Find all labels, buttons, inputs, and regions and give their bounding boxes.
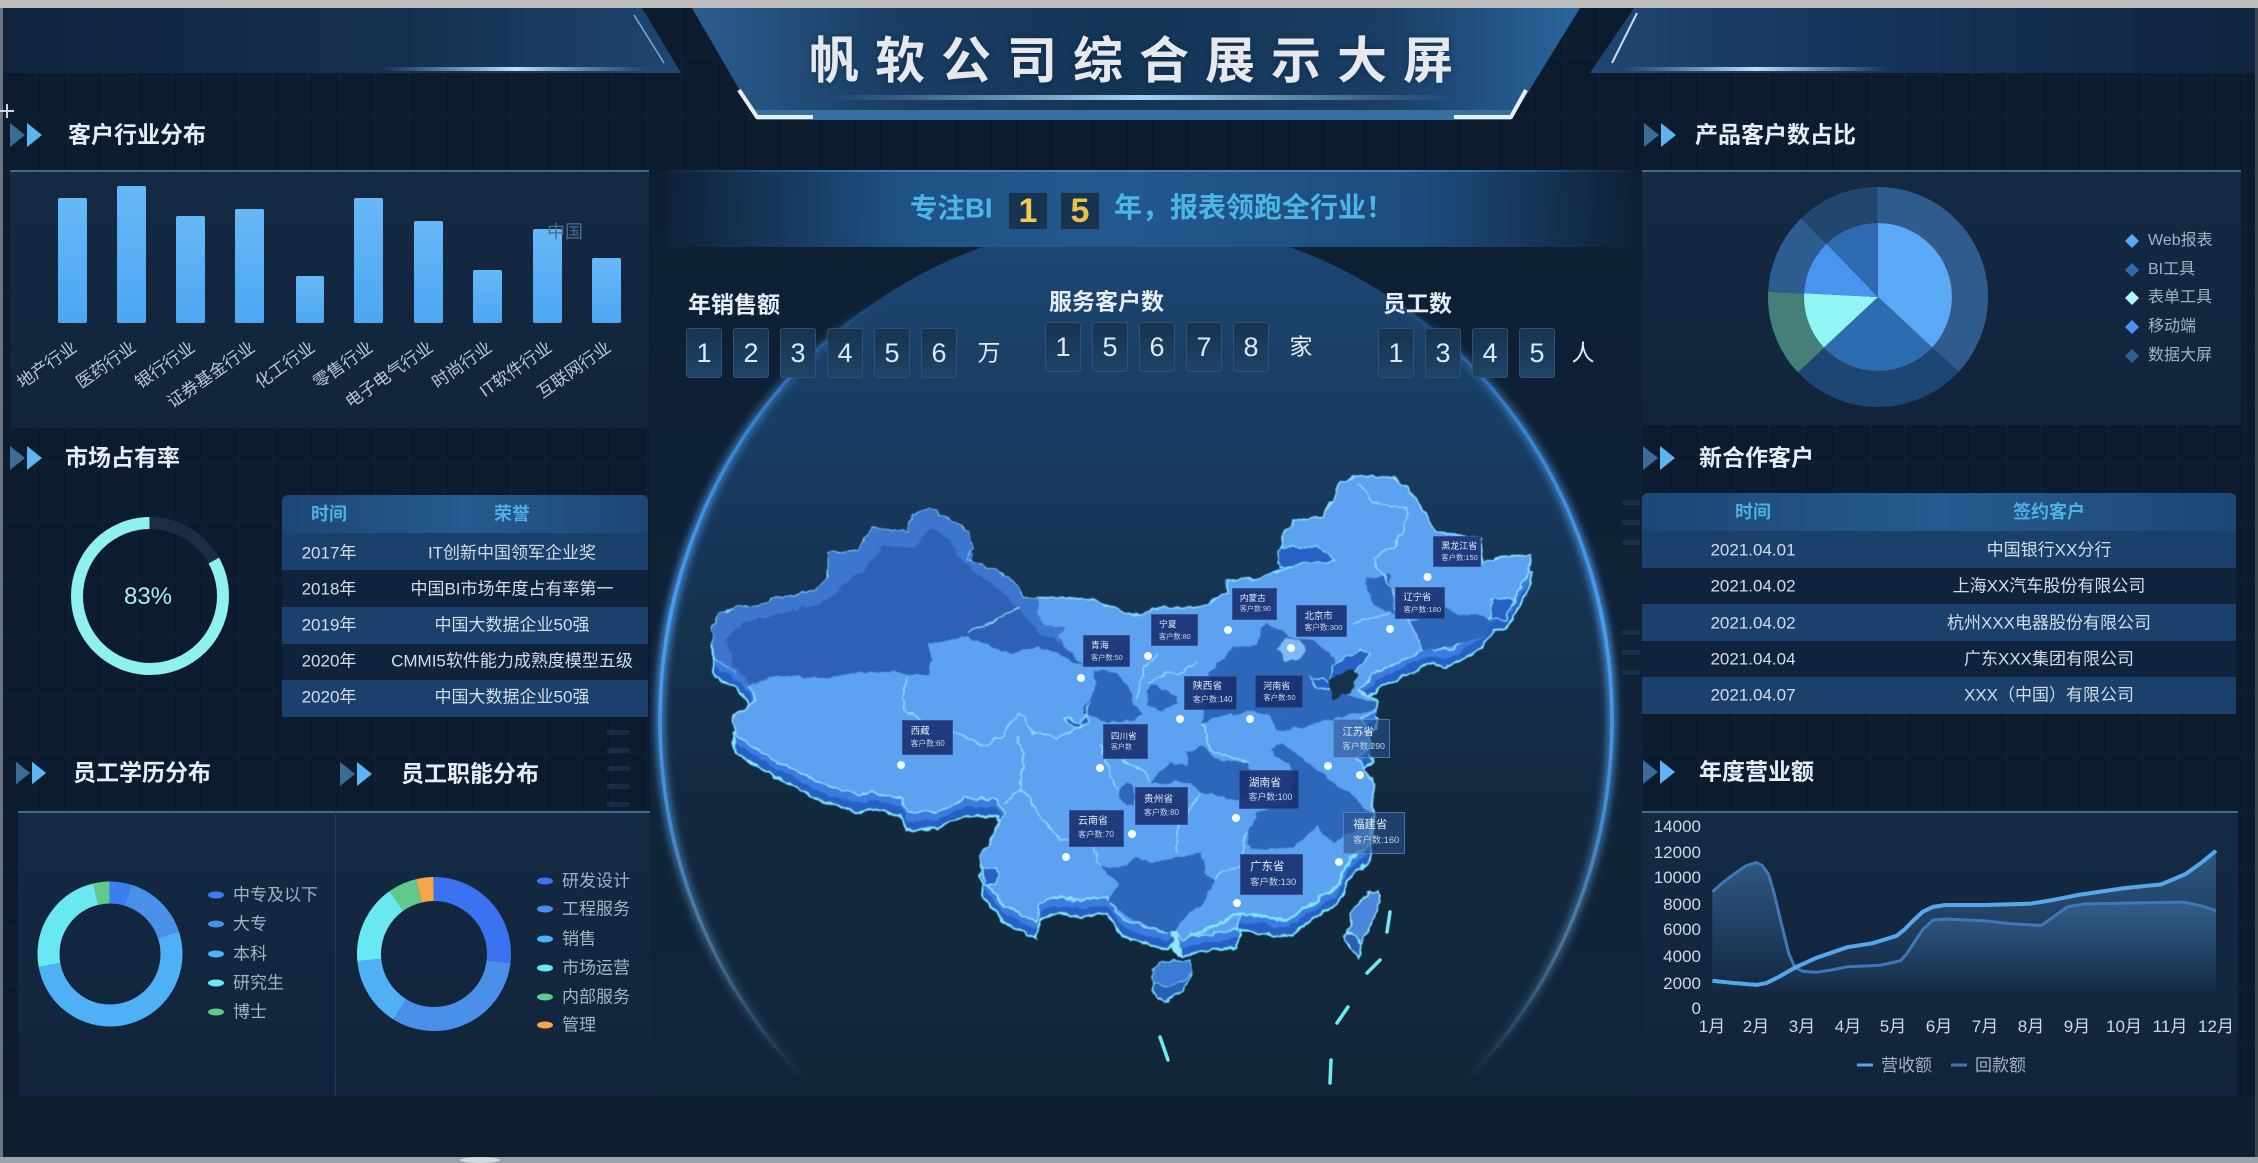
panel: 客户行业分布 bar chart: 时尚行业 <box>429 338 495 392</box>
table: 签约客户: 2021.04.01 <box>1710 540 1796 560</box>
pie legend: 表单工具 <box>2148 289 2212 306</box>
table: 荣誉 <box>282 495 648 717</box>
map labels: 客户数:50 <box>1263 693 1296 702</box>
panel: 客户行业分布 bar chart: IT软件行业 <box>476 338 555 401</box>
map labels: 青海 <box>1091 640 1109 650</box>
heading: 新合作客户 <box>1643 444 1814 470</box>
xinjiang and gansu dark region <box>725 526 1083 685</box>
panel: 客户行业分布 bar chart: 中国 <box>547 222 583 242</box>
panel: 年度营业额 line chart: 10000 <box>1654 868 1701 887</box>
donut chart <box>357 877 511 1031</box>
map labels: 客户数:80 <box>1144 808 1179 817</box>
map labels: 辽宁省 <box>1403 592 1431 602</box>
table: 签约客户: 2021.04.02 <box>1710 576 1796 596</box>
top right decorative band <box>1590 8 2255 73</box>
map labels: 湖南省 <box>1249 777 1281 789</box>
nested pie chart <box>1768 187 1988 407</box>
map labels: 河南省 <box>1263 681 1290 691</box>
gauge: 83% market share: 83% <box>124 583 172 610</box>
extruded edge, upper layer <box>712 485 1532 948</box>
metric: 年销售额: 1 <box>696 338 712 368</box>
panel: 年度营业额 line chart: 营收额 <box>1881 1056 1932 1075</box>
map labels: 客户数 <box>1111 744 1132 751</box>
map labels: 黑龙江省 <box>1441 541 1477 551</box>
panel: 客户行业分布 bar chart: 电子电气行业 <box>342 338 436 412</box>
panel: 产品客户数占比 pie <box>1642 170 2241 425</box>
donut legend: 管理 <box>562 1016 596 1034</box>
beijing <box>1278 638 1306 660</box>
table: 签约客户: XXX（中国）有限公司 <box>1964 686 2134 704</box>
table: 签约客户: 上海XX汽车股份有限公司 <box>1953 576 2145 596</box>
map labels: 江苏省 <box>1342 726 1374 738</box>
metric: 员工数: 员工数 <box>1383 290 1452 316</box>
heading: 客户行业分布: 客户行业分布 <box>68 122 206 148</box>
panel: 年度营业额 line chart: 0 <box>1692 999 1701 1018</box>
metric: 员工数: 3 <box>1435 338 1451 368</box>
map labels: 陕西省 <box>1193 681 1222 692</box>
map labels: 客户数:130 <box>1250 877 1296 887</box>
darker provinces <box>1080 575 1492 933</box>
panel: 年度营业额 line chart: 9月 <box>2064 1017 2090 1036</box>
metric: 年销售额: 5 <box>884 338 900 368</box>
panel: 年度营业额 line chart: 6000 <box>1663 920 1701 939</box>
metric: 年销售额: 年销售额 <box>688 292 780 318</box>
metric: 员工数: 人 <box>1572 340 1594 366</box>
panel: 年度营业额 line chart: 12000 <box>1654 843 1701 862</box>
map labels: 客户数:60 <box>911 739 945 748</box>
panel: 员工职能分布 <box>336 811 650 1096</box>
pie legend: Web报表 <box>2148 232 2213 249</box>
title banner <box>692 8 1580 120</box>
donut chart <box>38 882 182 1026</box>
panel: 年度营业额 line chart: 10月 <box>2106 1017 2142 1036</box>
xinjiang rim <box>712 508 1083 687</box>
center slogan banner <box>667 170 1634 247</box>
map labels: 客户数:300 <box>1305 623 1343 632</box>
donut legend: 研究生 <box>233 974 284 992</box>
map labels: 云南省 <box>1078 816 1108 827</box>
table: 荣誉: 2019年 <box>302 616 356 634</box>
metric: 服务客户数: 1 <box>1055 332 1071 362</box>
table: 签约客户: 签约客户 <box>2013 502 2085 522</box>
donut legend: 市场运营 <box>562 958 630 978</box>
map labels: 客户数:160 <box>1353 835 1399 845</box>
top left decorative band <box>3 8 681 73</box>
table: 荣誉: IT创新中国领军企业奖 <box>428 544 596 562</box>
map labels: 客户数:50 <box>1091 653 1123 662</box>
panel: 年度营业额 line chart: 4月 <box>1835 1017 1861 1036</box>
metric: 服务客户数: 服务客户数 <box>1049 288 1164 314</box>
heading: 员工学历分布: 员工学历分布 <box>73 760 211 786</box>
metric: 年销售额: 3 <box>790 338 806 368</box>
metric: 员工数: 5 <box>1529 338 1545 368</box>
table: 荣誉: 2020年 <box>302 688 356 706</box>
donut legend <box>537 872 630 1034</box>
map labels <box>902 536 1481 895</box>
panel: 年度营业额 line chart: 2月 <box>1743 1017 1769 1036</box>
metric: 年销售额: 万 <box>978 340 1000 366</box>
table: 荣誉: 中国大数据企业50强 <box>435 616 589 634</box>
pie legend: 移动端 <box>2148 318 2196 335</box>
donut legend: 中专及以下 <box>233 886 318 904</box>
map labels: 客户数:150 <box>1441 553 1478 562</box>
donut legend: 研发设计 <box>562 872 630 890</box>
heading: 新合作客户: 新合作客户 <box>1699 444 1814 470</box>
donut legend <box>208 886 318 1022</box>
table: 荣誉: 中国大数据企业50强 <box>435 688 589 706</box>
table: 荣誉: 2017年 <box>302 544 356 562</box>
map labels: 西藏 <box>911 726 930 737</box>
panel: 年度营业额 line chart: 7月 <box>1972 1017 1998 1036</box>
metric: 年销售额: 2 <box>743 338 759 368</box>
map labels: 广东省 <box>1250 861 1284 873</box>
heading: 年度营业额: 年度营业额 <box>1699 758 1814 784</box>
panel: 客户行业分布 bar chart <box>10 170 649 428</box>
center slogan banner: 1 <box>1019 192 1037 230</box>
map top surface <box>712 477 1532 940</box>
table: 签约客户: 2021.04.04 <box>1710 650 1796 668</box>
panel: 年度营业额 line chart: 4000 <box>1663 947 1701 966</box>
panel: 年度营业额 line chart <box>1642 811 2238 1096</box>
panel: 客户行业分布 bar chart: 医药行业 <box>73 338 139 392</box>
taiwan extrusion <box>1345 930 1362 958</box>
panel: 年度营业额 line chart: 5月 <box>1880 1017 1906 1036</box>
map labels: 客户数:100 <box>1249 792 1292 802</box>
metric: 员工数: 4 <box>1482 338 1498 368</box>
panel: 年度营业额 line chart: 1月 <box>1699 1017 1725 1036</box>
table: 签约客户: 杭州XXX电器股份有限公司 <box>1947 614 2151 632</box>
panel: 年度营业额 line chart: 回款额 <box>1975 1056 2026 1075</box>
map labels: 贵州省 <box>1144 794 1173 805</box>
metric: 员工数 <box>1378 290 1594 378</box>
panel: 年度营业额 line chart: 2000 <box>1663 974 1701 993</box>
table: 荣誉: 时间 <box>311 504 347 524</box>
map labels: 客户数:80 <box>1159 632 1191 641</box>
gauge: 83% market share <box>71 517 229 675</box>
table: 签约客户 <box>1642 493 2236 714</box>
map labels: 内蒙古 <box>1240 593 1266 603</box>
panel: 年度营业额 line chart: 3月 <box>1789 1017 1815 1036</box>
heading: 市场占有率: 市场占有率 <box>65 444 180 470</box>
panel: 客户行业分布 bar chart: 银行行业 <box>132 338 198 392</box>
taiwan <box>1348 890 1380 943</box>
donut legend: 博士 <box>233 1002 267 1022</box>
metric: 员工数: 1 <box>1388 338 1404 368</box>
table: 荣誉: 荣誉 <box>494 504 530 524</box>
table: 荣誉: 2020年 <box>302 652 356 670</box>
metric: 服务客户数: 8 <box>1243 332 1259 362</box>
china map <box>710 474 1534 1085</box>
metric: 年销售额 <box>686 292 1000 378</box>
hainan bridge <box>1173 930 1180 958</box>
province boundary lines <box>902 483 1423 880</box>
map labels: 客户数:70 <box>1078 830 1114 839</box>
table: 荣誉: 2018年 <box>302 580 356 598</box>
hainan <box>1152 960 1193 1003</box>
heading: 产品客户数占比: 产品客户数占比 <box>1695 122 1856 148</box>
panel: 客户行业分布 bar chart: 化工行业 <box>252 338 318 392</box>
center slogan banner: 年，报表领跑全行业！ <box>1114 192 1394 223</box>
table: 签约客户: 2021.04.07 <box>1710 686 1796 704</box>
metric: 年销售额: 6 <box>931 338 947 368</box>
donut legend: 销售 <box>562 930 596 948</box>
metric: 服务客户数: 6 <box>1149 332 1165 362</box>
table: 签约客户: 中国银行XX分行 <box>1987 540 2111 560</box>
heading: 员工职能分布: 员工职能分布 <box>401 760 539 786</box>
panel: 年度营业额 line chart: 8月 <box>2018 1017 2044 1036</box>
hainan top <box>1152 960 1193 987</box>
panel: 年度营业额 line chart: 8000 <box>1663 895 1701 914</box>
city dots <box>897 573 1432 907</box>
title banner: 帆软公司综合展示大屏 <box>809 33 1469 89</box>
donut legend: 大专 <box>233 914 267 934</box>
table: 签约客户: 时间 <box>1735 502 1771 522</box>
table: 荣誉: 中国BI市场年度占有率第一 <box>410 580 614 598</box>
panel: 客户行业分布 bar chart: 零售行业 <box>310 338 376 392</box>
metric: 服务客户数 <box>1045 288 1312 372</box>
heading: 市场占有率 <box>10 444 180 470</box>
pie legend: 数据大屏 <box>2148 347 2212 364</box>
deep blue coastal inlets <box>983 545 1512 884</box>
table: 签约客户: 2021.04.02 <box>1710 614 1796 632</box>
panel: 客户行业分布 bar chart: 地产行业 <box>14 338 80 392</box>
center slogan banner: 5 <box>1071 192 1089 230</box>
map labels: 客户数:290 <box>1342 741 1385 751</box>
south sea dashes <box>1160 912 1390 1083</box>
map labels: 客户数:180 <box>1403 605 1441 614</box>
metric: 服务客户数: 5 <box>1102 332 1118 362</box>
panel: 年度营业额 line chart: 11月 <box>2153 1017 2187 1036</box>
panel: 年度营业额 line chart: 12月 <box>2198 1017 2234 1036</box>
metric: 服务客户数: 家 <box>1290 334 1312 360</box>
panel: 员工学历分布 <box>18 811 336 1096</box>
bohai sea <box>1328 668 1357 700</box>
donut legend: 本科 <box>233 944 267 964</box>
map labels: 四川省 <box>1111 731 1137 741</box>
table: 签约客户: 广东XXX集团有限公司 <box>1964 650 2134 668</box>
pie legend <box>2125 231 2213 364</box>
panel: 年度营业额 line chart: 6月 <box>1926 1017 1952 1036</box>
map labels: 宁夏 <box>1159 619 1177 629</box>
table: 荣誉: CMMI5软件能力成熟度模型五级 <box>391 652 633 670</box>
panel: 客户行业分布 bar chart: 证券基金行业 <box>164 338 258 412</box>
southeast coast glow <box>1190 812 1373 937</box>
extruded edge, lower layer <box>712 494 1532 957</box>
center slogan banner: 专注BI <box>910 192 992 223</box>
map labels: 客户数:90 <box>1240 606 1271 613</box>
metric: 年销售额: 4 <box>837 338 853 368</box>
map labels: 福建省 <box>1353 819 1387 831</box>
metric: 服务客户数: 7 <box>1196 332 1212 362</box>
panel: 年度营业额 line chart: 14000 <box>1654 817 1701 836</box>
heading: 员工职能分布 <box>340 760 539 786</box>
pie legend: BI工具 <box>2148 261 2195 278</box>
donut legend: 工程服务 <box>562 900 630 918</box>
heading: 年度营业额 <box>1643 758 1814 784</box>
map labels: 客户数:140 <box>1193 695 1232 704</box>
donut legend: 内部服务 <box>562 988 630 1006</box>
map labels: 北京市 <box>1305 610 1333 621</box>
panel: 客户行业分布 bar chart: 互联网行业 <box>534 338 614 402</box>
